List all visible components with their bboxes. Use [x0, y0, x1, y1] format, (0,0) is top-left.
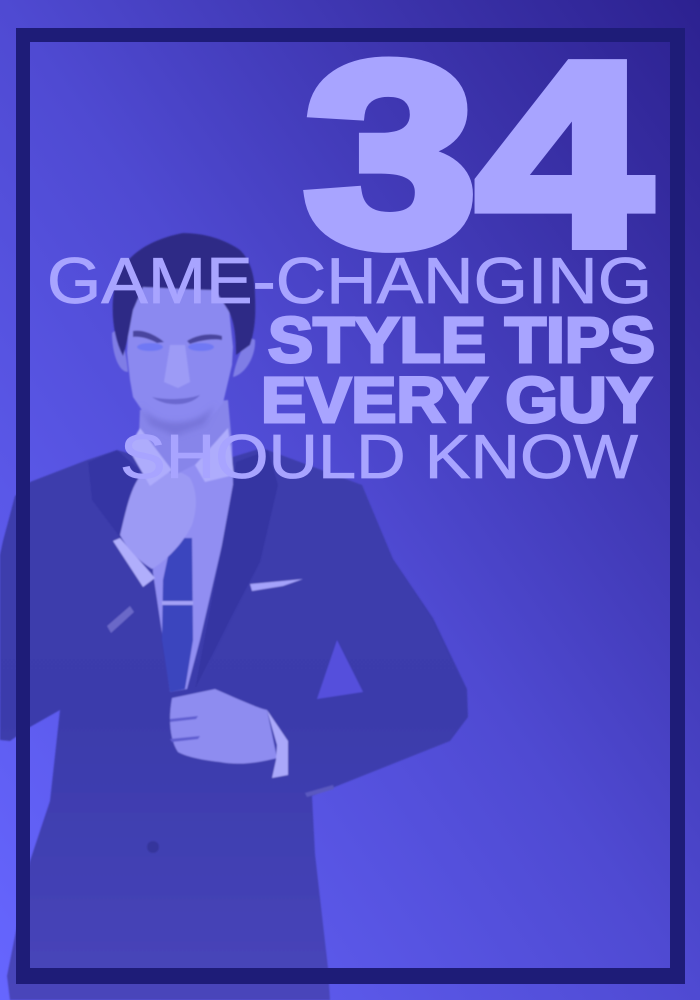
eyes — [137, 343, 214, 351]
sleeve buttons — [107, 606, 134, 633]
tie — [162, 538, 193, 692]
line: style tips: STYLE TIPS — [268, 304, 655, 376]
arm gap background — [317, 640, 363, 699]
headline — [47, 10, 655, 492]
shirt — [140, 440, 233, 692]
left lapel — [88, 450, 140, 540]
neck — [138, 400, 232, 475]
man in suit — [0, 233, 468, 1000]
shirt cuff lower — [267, 710, 288, 778]
nose — [164, 345, 190, 388]
sleeve buttons lower — [305, 785, 334, 797]
line: game-changing: GAME-CHANGING — [47, 244, 652, 317]
raised hand — [120, 470, 196, 569]
shirt cuff upper — [113, 538, 155, 587]
line: should know: SHOULD KNOW — [120, 423, 639, 492]
stubble — [140, 405, 215, 436]
tie clip — [162, 601, 193, 605]
finger shadows — [170, 716, 200, 742]
hair — [113, 233, 255, 356]
ears — [112, 332, 255, 377]
collar — [128, 428, 234, 486]
right lapel — [195, 450, 278, 689]
eyebrows — [133, 331, 222, 344]
face — [127, 275, 233, 433]
pocket square — [250, 579, 303, 591]
line: every guy: EVERY GUY — [261, 364, 652, 436]
lower hand — [170, 689, 277, 764]
jacket button — [147, 841, 159, 853]
mouth — [152, 395, 200, 404]
number 34: 34 — [304, 10, 652, 300]
jacket — [0, 448, 468, 1000]
